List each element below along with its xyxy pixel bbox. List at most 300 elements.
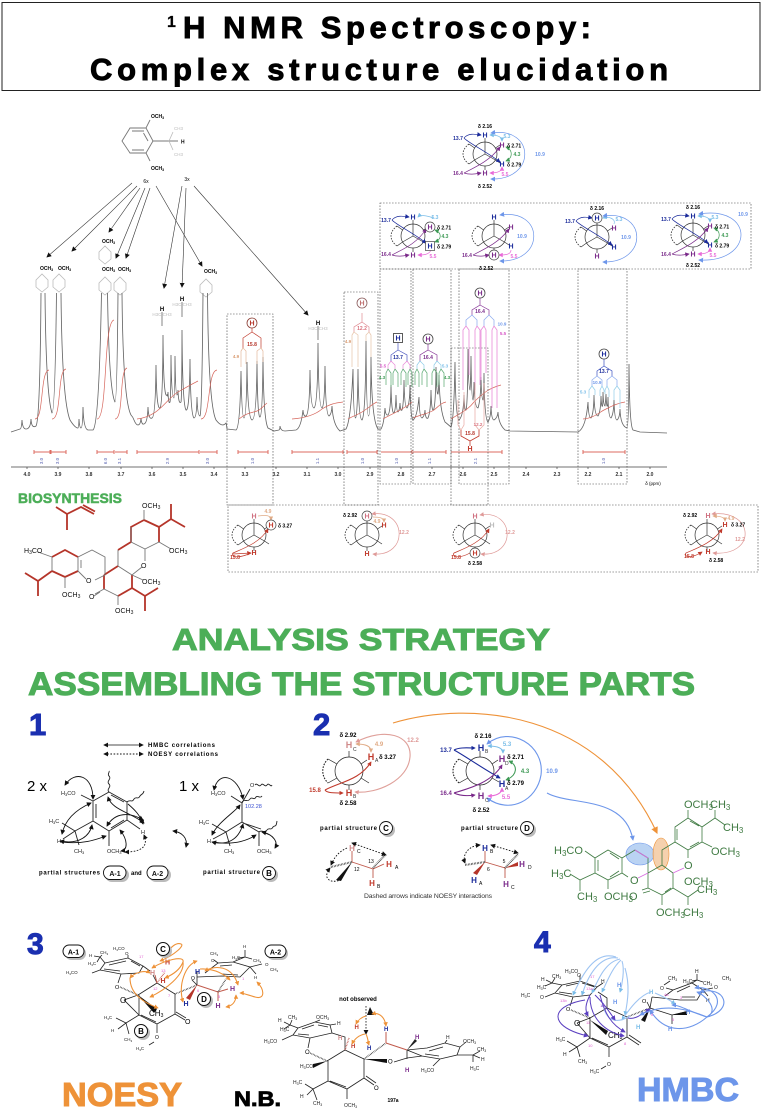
biosynthetic natural product structure: 3 — [158, 581, 161, 587]
NOESY structure: CH — [124, 1037, 130, 1042]
legend: correlations — [104, 743, 219, 758]
Newman projection: partial structure D: A — [505, 786, 509, 792]
NOESY structure: CH — [253, 958, 260, 963]
structure 197a with not-observed NOE: O — [388, 1060, 393, 1066]
methoxy ring annotations: OCH — [102, 239, 113, 245]
Newman projection: H-C highlighted, lower panel: H — [364, 551, 370, 558]
HMBC structure: CH — [703, 981, 710, 987]
structure 197a with not-observed NOE: 3 — [484, 1049, 486, 1053]
Newman projection: partial structure D: H — [478, 743, 484, 753]
NOESY structure: CO — [71, 970, 78, 975]
chair conformer C: B — [377, 884, 381, 890]
NOESY structure: H — [150, 970, 155, 977]
partial structure A: 3 — [65, 792, 68, 797]
Newman projection: partial structure C: A — [375, 758, 379, 764]
partial structure A: 2 x — [27, 778, 48, 795]
multiplet tree 2.9 ppm: H — [359, 300, 365, 308]
partial structure A: C — [55, 819, 59, 825]
Newman projection: full C, lower panel: δ 3.27 — [731, 522, 745, 528]
assembled structure in green: 3 — [559, 872, 564, 881]
HMBC structure: 11 — [586, 1020, 591, 1025]
top substructure: dimethoxy isopropyl arene: H — [181, 140, 185, 146]
structure 197a with not-observed NOE: CH — [288, 1015, 295, 1021]
Newman projection: partial structure D: D — [505, 761, 509, 767]
structure 197a with not-observed NOE: O — [374, 1086, 379, 1092]
chair conformer C: A — [395, 865, 399, 871]
caption: Dashed arrows indicate NOESY interactions — [364, 893, 493, 900]
NOESY structure: CH — [100, 950, 106, 955]
Newman projection: partial structure D: 13.7 — [440, 748, 452, 754]
structure 197a with not-observed NOE: 3 — [355, 1105, 357, 1109]
labels: partial structures A-1, A-2, B: B — [266, 869, 272, 878]
HMBC structure: H — [636, 1025, 640, 1031]
HMBC structure: CH — [552, 974, 559, 980]
Newman projection: full D in panel: H — [690, 252, 696, 258]
biosynthetic natural product structure: OCH — [142, 503, 158, 510]
Newman projection: H-B highlighted: δ 2.16 — [590, 206, 604, 212]
Newman projection: full partial structure D, top: H — [482, 170, 488, 178]
biosynthetic natural product structure: 3 — [158, 505, 161, 511]
Newman projection: full partial structure D, top: 16.4 — [453, 171, 463, 177]
HMBC structure: 3 — [559, 976, 561, 980]
top substructure: dimethoxy isopropyl arene — [122, 114, 185, 172]
Newman projection: H-D and H-A highlighted: H — [410, 252, 416, 260]
Newman projection: partial structure D: δ 2.79 — [507, 781, 525, 787]
HMBC structure: 13a — [586, 986, 593, 991]
Newman projection: partial structure D: H — [478, 791, 484, 801]
Newman projection: H-B highlighted: 13.7 — [565, 219, 575, 225]
chair conformer C: 13 — [368, 859, 374, 865]
Newman projection: full D in panel: H — [690, 214, 696, 220]
assembled structure in green: OCH — [684, 876, 708, 888]
Newman projection: full partial structure D, top: 5.5 — [502, 172, 509, 178]
Newman projection: H-A highlighted, lower panel: H — [251, 550, 257, 557]
NOESY structure: 3 — [107, 1017, 109, 1021]
Newman projection: full partial structure D, top: H — [482, 132, 488, 140]
multiplet tree 2.7 ppm — [415, 334, 451, 387]
HMBC structure: 3 — [687, 981, 689, 985]
Newman projection: partial structure C: δ 2.92 — [340, 733, 357, 739]
Newman projection: partial structure C: C — [353, 747, 357, 753]
structure 197a with not-observed NOE: C — [286, 1027, 290, 1033]
title: 1 — [167, 14, 176, 31]
HMBC structure: O — [642, 999, 647, 1005]
partial structure A: CH — [74, 849, 82, 855]
structure 197a with not-observed NOE: OCH — [344, 1103, 355, 1109]
multiplet tree 2.5 ppm with 2.6 ppm below: 15.8 — [465, 431, 475, 437]
Newman projection: H-B highlighted: 10.9 — [621, 235, 631, 241]
multiplet tree 2.7 ppm: 4.3 — [444, 375, 451, 380]
methoxy ring annotations: 3 — [69, 268, 71, 272]
Newman projection: H-D and H-A highlighted: δ 2.71 — [437, 226, 451, 232]
title — [2, 2, 760, 90]
top substructure: dimethoxy isopropyl arene: CH3 — [174, 126, 183, 131]
structure 197a with not-observed NOE: H — [405, 1068, 409, 1074]
NOESY structure: H — [232, 955, 235, 960]
methoxy ring annotations: 3 — [129, 269, 131, 273]
structure 197a with not-observed NOE: H — [293, 1080, 297, 1086]
ppm axis: 4.0 — [24, 472, 31, 478]
NOESY structure: 3 — [260, 960, 262, 964]
ppm axis: 3.5 — [180, 472, 187, 478]
biosynthesis label: BIOSYNTHESIS — [18, 491, 122, 506]
structure 197a with not-observed NOE: 3 — [284, 1029, 286, 1033]
methoxy ring annotations — [36, 239, 217, 297]
methoxy ring annotations: OCH — [102, 267, 113, 273]
multiplet tree 2.5 ppm with 2.6 ppm below: 10.9 — [498, 322, 507, 326]
assembled structure in green: OCH — [604, 891, 628, 903]
biosynthetic natural product structure: OCH — [142, 579, 158, 586]
Newman projection: H-B highlighted, lower panel: H — [489, 522, 495, 530]
chair conformer D: 5 — [503, 859, 506, 865]
methoxy ring annotations: 3 — [215, 271, 217, 275]
Newman projection: H-C highlighted: 10.9 — [517, 234, 527, 240]
chair conformer D — [464, 844, 532, 891]
NOESY structure: H — [104, 1015, 107, 1020]
NOESY structure: 3 — [216, 953, 218, 957]
NOESY structure: H — [254, 975, 257, 980]
assembled structure in green: 3 — [739, 826, 744, 835]
legend: correlations: NOESY correlations — [148, 752, 219, 758]
Newman projection: full D in panel: δ 2.79 — [715, 244, 729, 250]
Newman projection: full D in panel: 10.9 — [738, 212, 748, 218]
top substructure: dimethoxy isopropyl arene: 3 — [162, 168, 164, 172]
labels: partial structures C and D: D — [524, 824, 530, 833]
ppm axis: 2.8 — [398, 472, 405, 478]
HMBC structure: CH — [578, 1059, 585, 1065]
NOESY structure: CH — [270, 967, 276, 972]
Newman projection: H-D and H-A highlighted: 4.3 — [442, 234, 449, 240]
NOESY structure: 3 — [235, 957, 237, 961]
Newman projection: full C, lower panel: 4.9 — [728, 516, 735, 522]
NOESY structure: H — [88, 961, 91, 966]
ppm axis: 2.4 — [523, 472, 530, 478]
NOESY structure: O — [155, 1035, 159, 1041]
integration bars and values: 1.0 — [360, 457, 365, 464]
structure 197a with not-observed NOE: O — [305, 1050, 310, 1056]
NOESY structure: O — [125, 951, 129, 956]
integration bars and values: 1.0 — [601, 457, 606, 464]
HMBC structure: 3 — [729, 978, 731, 982]
assembled structure in green: 3 — [708, 803, 713, 812]
HMBC structure: H — [521, 993, 525, 999]
Newman projection: full partial structure D, top — [453, 124, 545, 190]
multiplet tree 2.5 ppm with 2.6 ppm below: 5.5 — [500, 331, 507, 336]
chair conformer D: A — [479, 881, 483, 887]
HMBC structure: 3 — [585, 1061, 587, 1065]
isopropyl methine annotations: H — [160, 307, 164, 313]
NOESY structure: O — [191, 976, 195, 982]
multiplicity labels: 6x — [143, 179, 149, 185]
HMBC structure: O — [566, 1007, 571, 1013]
structure 197a with not-observed NOE: H — [280, 1027, 284, 1033]
highlight ellipses — [626, 838, 669, 870]
structure 197a with not-observed NOE: H — [421, 1068, 425, 1074]
HMBC structure: 3 — [569, 971, 571, 975]
Newman projection: H-B highlighted: H — [594, 216, 600, 222]
Newman projection: H-C highlighted: H — [508, 224, 514, 232]
Newman projection: full partial structure D, top: δ 2.52 — [478, 184, 492, 190]
structure 197a with not-observed NOE: H — [300, 1064, 304, 1070]
NOESY structure: C — [109, 1015, 113, 1020]
NOESY structure — [66, 944, 278, 1052]
NOESY structure: H — [160, 978, 166, 985]
Newman projection: full partial structure D, top: δ 2.16 — [478, 124, 492, 130]
Newman projection: partial structure D: H — [499, 754, 505, 764]
assembled structure in green: 3 — [735, 850, 740, 859]
Newman projection: partial structure D: B — [485, 749, 489, 755]
ppm axis: δ (ppm) — [645, 481, 661, 486]
isopropyl methine annotations: H — [180, 297, 184, 303]
partial structure A: 3 — [53, 820, 56, 825]
assembled structure in green: CH — [710, 799, 726, 811]
Newman projection: partial structure C: δ 3.27 — [379, 755, 397, 761]
multiplet tree 2.1 ppm: 13.7 — [599, 369, 609, 375]
NOESY structure: 3 — [139, 1048, 141, 1052]
assembled structure in green: 3 — [562, 849, 567, 858]
HMBC structure: 3 — [541, 987, 543, 991]
NOESY structure: H — [230, 986, 235, 993]
assembled structure in green: H — [551, 868, 559, 880]
Newman projection: full partial structure D, top: H — [499, 142, 505, 150]
Newman projection: partial structure D — [440, 734, 558, 814]
pills: A-1, C, A-2, B, D: A-1 — [68, 950, 79, 956]
ppm axis: 2.5 — [491, 472, 498, 478]
structure 197a with not-observed NOE: 3 — [320, 1103, 322, 1107]
structure 197a with not-observed NOE: 3 — [327, 1017, 329, 1021]
isoprene unit — [56, 505, 95, 530]
Newman projection: H-A highlighted, lower panel — [230, 509, 292, 561]
Newman projection: full partial structure D, top: H — [499, 162, 505, 168]
NMR spectrum trace — [11, 293, 667, 433]
HMBC structure — [521, 956, 731, 1075]
Newman projection: full D in panel: 16.4 — [661, 252, 671, 258]
NOESY structure: H — [111, 1028, 114, 1033]
Newman projection: partial structure C: H — [368, 752, 374, 762]
Newman projection: H-B highlighted, lower panel: H — [472, 550, 478, 558]
multiplicity labels: 3x — [184, 177, 190, 183]
integration bars and values: 2.9 — [165, 457, 170, 464]
Newman projection: full D in panel: 13.7 — [661, 217, 671, 223]
Newman projection: H-B highlighted, lower panel: 12.2 — [505, 530, 515, 536]
exchange arrow between A and B — [173, 831, 186, 847]
HMBC structure: H — [617, 983, 621, 989]
Newman projection: partial structure D: 10.9 — [546, 769, 558, 775]
multiplet tree 2.5 ppm with 2.6 ppm below: H — [467, 446, 473, 453]
structure 197a with not-observed NOE: 197a — [387, 1098, 399, 1104]
title: Complex structure elucidation — [90, 52, 668, 87]
HMBC structure: H — [706, 998, 710, 1004]
integration bars and values — [34, 450, 625, 464]
NOESY structure: H — [195, 969, 200, 976]
NOESY structure: 3 — [161, 1013, 164, 1019]
structure 197a with not-observed NOE: 3 — [297, 1082, 299, 1086]
NOESY structure: 3 — [91, 963, 93, 967]
HMBC structure: 13b — [560, 998, 567, 1003]
structure 197a with not-observed NOE: CO — [306, 1064, 313, 1070]
NOESY structure: H — [165, 960, 170, 966]
assembled structure in green: 3 — [628, 895, 633, 904]
Newman projection: H-D and H-A highlighted: 5.5 — [430, 254, 437, 260]
NOESY structure: C — [141, 1046, 145, 1051]
structure 197a with not-observed NOE: H — [367, 1046, 371, 1052]
Newman projection: H-C highlighted: H — [491, 252, 497, 260]
Newman projection: H-B highlighted, lower panel: 15.8 — [451, 555, 461, 561]
HMBC structure: CH — [668, 976, 675, 982]
structure 197a with not-observed NOE: 3 — [474, 1068, 476, 1072]
multiplet tree 2.5 ppm with 2.6 ppm below: H — [477, 290, 483, 298]
Newman projection: partial structure C: 4.9 — [375, 742, 384, 748]
structure 197a with not-observed NOE: 3 — [304, 1066, 306, 1070]
chair conformer C: H — [349, 844, 355, 853]
partial structure A: OCH — [107, 849, 119, 855]
labels: partial structures C and D: C — [383, 824, 389, 833]
integral curves — [35, 320, 625, 419]
integration bars and values: 1.1 — [315, 457, 320, 464]
methoxy ring annotations: OCH — [118, 267, 129, 273]
HMBC label: HMBC — [637, 1071, 739, 1108]
chair conformer C: C — [357, 849, 361, 855]
Newman projection: partial structure C: δ 2.58 — [340, 801, 357, 807]
HMBC structure: 5 — [672, 1017, 675, 1022]
top substructure: dimethoxy isopropyl arene: OCH — [151, 166, 162, 172]
Newman projection: partial structure D: C — [485, 798, 489, 804]
pills: A-1, C, A-2, B, D: C — [160, 945, 166, 954]
Newman projection: partial structure D: 16.4 — [440, 791, 452, 797]
Newman projection: partial structure D: δ 2.52 — [473, 808, 490, 814]
methoxy ring annotations: OCH — [58, 266, 69, 272]
HMBC structure: 3 — [680, 995, 683, 1000]
NOESY structure: H — [216, 1003, 221, 1010]
labels: partial structures A-1, A-2, B: partial structures — [39, 870, 101, 876]
step number 2: 2 — [313, 707, 330, 742]
structure 197a with not-observed NOE: not observed — [339, 997, 377, 1003]
structure 197a with not-observed NOE: CH — [477, 1047, 484, 1053]
structure 197a with not-observed NOE: H — [354, 1025, 359, 1031]
Newman projection: full partial structure D, top: 5.3 — [504, 134, 511, 140]
partial structure B: O — [250, 783, 255, 789]
chair conformer C — [327, 843, 399, 890]
Newman projection: partial structure C: 15.8 — [309, 788, 321, 794]
title: H NMR Spectroscopy: — [183, 10, 591, 45]
multiplet tree 2.8 ppm: 13.7 — [393, 355, 403, 361]
chair conformer C: H — [386, 860, 392, 869]
NOESY structure: H — [243, 944, 246, 949]
HMBC structure: 3 — [675, 978, 677, 982]
structure 197a with not-observed NOE: H — [278, 1018, 282, 1024]
assembled structure in green: OCH — [711, 846, 735, 858]
HMBC structure: H — [601, 979, 605, 985]
multiplet tree 2.5 ppm with 2.6 ppm below: 16.4 — [475, 309, 485, 315]
biosynthetic natural product structure: O — [86, 578, 92, 585]
isopropyl methine annotations: H3C CH3 — [172, 302, 192, 307]
biosynthetic natural product structure — [24, 503, 188, 616]
step number 1: 1 — [29, 707, 46, 742]
dashed linking boxes — [227, 203, 758, 572]
HMBC structure: H — [563, 1052, 567, 1058]
Newman projection: H-C highlighted, lower panel: 12.2 — [399, 530, 409, 536]
labels: partial structures A-1, A-2, B: A-2 — [152, 871, 163, 878]
structure 197a with not-observed NOE: H — [338, 1036, 342, 1042]
long arrows to green structure — [393, 713, 657, 840]
HMBC structure: H — [565, 969, 569, 975]
HMBC structure: H — [590, 1069, 594, 1075]
chair conformer C: 12 — [354, 867, 360, 873]
ppm axis: 2.9 — [367, 472, 374, 478]
Newman projection: H-C highlighted, lower panel: H — [381, 522, 387, 530]
partial structure A — [27, 771, 145, 855]
Newman projection: partial structure C: H — [346, 788, 352, 798]
biosynthetic natural product structure: OCH — [169, 548, 185, 555]
NOESY structure: CH — [210, 951, 216, 956]
structure 197a with not-observed NOE: 3 — [268, 1041, 270, 1045]
structure 197a with not-observed NOE: 3 — [474, 1041, 476, 1045]
Newman projection: full D in panel: 4.3 — [722, 233, 729, 239]
HMBC structure: 3 — [560, 1039, 562, 1043]
biosynthetic natural product structure: OCH — [115, 608, 131, 615]
structure 197a with not-observed NOE: H — [351, 1044, 355, 1050]
chair conformer D: H — [482, 844, 488, 853]
ppm axis — [11, 467, 667, 486]
HMBC structure: 3 — [620, 1035, 623, 1041]
integration bars and values: 3.1 — [117, 457, 122, 464]
NOESY label: NOESY — [62, 1076, 182, 1113]
HMBC structure: 4a — [664, 992, 669, 997]
ppm axis: 2.7 — [429, 472, 436, 478]
NOESY structure: 13 — [161, 968, 166, 973]
Newman projection: H-A highlighted, lower panel: H — [251, 514, 257, 520]
ppm axis: 3.7 — [118, 472, 125, 478]
multiplet tree 3.3 ppm: 4.9 — [233, 354, 240, 359]
Newman projection: partial structure D: H — [499, 779, 505, 789]
assembled structure in green: 3 — [713, 888, 718, 897]
labels: partial structures C and D: partial structure — [461, 826, 519, 832]
labels: partial structures A-1, A-2, B: partial structure — [203, 870, 261, 876]
NOESY structure: O — [185, 1019, 191, 1026]
ppm axis: 3.0 — [335, 472, 342, 478]
integration bars and values: 3.0 — [205, 457, 210, 464]
assembled structure in green: CH — [697, 884, 713, 896]
integration bars and values: 3.0 — [55, 457, 60, 464]
HMBC structure: CH — [608, 1031, 620, 1040]
ppm axis: 2.0 — [647, 472, 654, 478]
Newman projection: partial structure C: H — [346, 740, 352, 750]
labels: partial structures A-1, A-2, B: A-1 — [109, 871, 121, 878]
ppm axis: 2.1 — [616, 472, 623, 478]
top substructure: dimethoxy isopropyl arene: CH3 — [174, 152, 183, 157]
Newman projection: H-B highlighted: 5.3 — [616, 217, 623, 223]
NOESY structure: O — [120, 996, 126, 1005]
Newman projection: H-C highlighted: H — [491, 214, 497, 222]
NOESY structure: 17 — [139, 954, 144, 959]
biosynthetic natural product structure: 3 — [131, 610, 134, 616]
Newman projection: H-B highlighted, lower panel — [451, 514, 515, 567]
Newman projection: H-B highlighted — [565, 206, 637, 262]
structure 197a with not-observed NOE: C — [299, 1080, 303, 1086]
methoxy ring annotations: 3 — [113, 241, 115, 245]
ppm axis: 3.9 — [55, 472, 62, 478]
Newman projection: full partial structure D, top: 10.9 — [535, 152, 545, 158]
structure 197a with not-observed NOE: CO — [270, 1039, 277, 1045]
partial structure B: 3 — [269, 850, 272, 855]
HMBC structure: O — [714, 985, 718, 991]
assembled structure in green: H — [554, 845, 562, 857]
HMBC structure: H — [668, 1027, 672, 1033]
multiplet tree 2.1 ppm: H — [601, 352, 607, 358]
Newman projection: partial structure C: B — [353, 794, 357, 800]
Newman projection: partial structure D: 5.5 — [502, 795, 511, 801]
Newman projection: partial structure D: 5.3 — [503, 742, 512, 748]
